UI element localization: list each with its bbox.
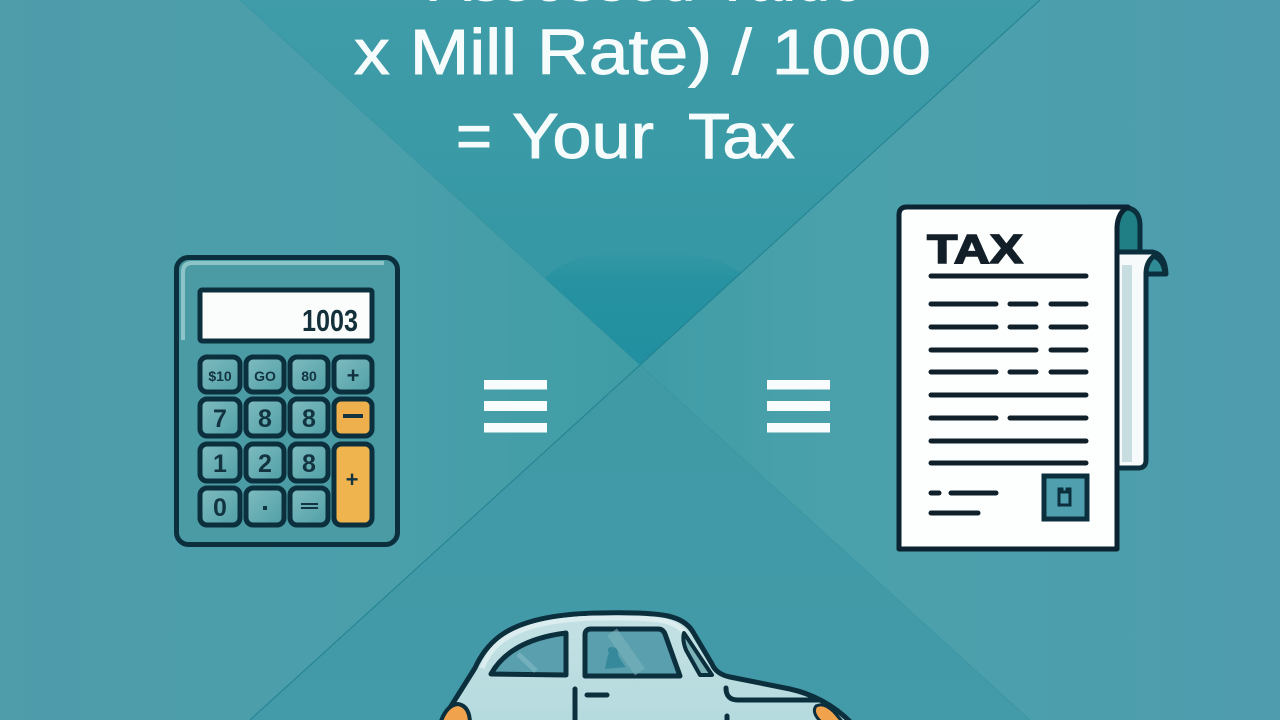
heading: formula (354, 0, 931, 172)
calculator key labels: 8 (258, 405, 272, 433)
icon: tax document (899, 207, 1166, 549)
calculator key labels: + (347, 363, 359, 388)
calculator key labels: 80 (301, 368, 317, 384)
document text lines (931, 276, 1086, 513)
calculator key labels: 7 (213, 405, 227, 433)
windshield (683, 633, 712, 675)
calculator key labels: 8 (302, 450, 316, 478)
icon: equals-style bars right (767, 380, 830, 432)
document page (899, 207, 1128, 549)
rear light (440, 704, 470, 720)
door details (575, 688, 820, 720)
calculator buttons (200, 357, 372, 525)
document title: TAX (927, 226, 1023, 272)
icon: equals-style bars left (484, 380, 547, 432)
document stamp (1044, 476, 1087, 519)
heading: formula: Tax (688, 100, 795, 172)
document back sheet (1116, 208, 1166, 468)
calculator display: 1003 (302, 303, 358, 338)
rear window (491, 633, 566, 675)
icon: calculator (176, 258, 398, 544)
calculator key labels: 8 (302, 405, 316, 433)
calculator display (200, 290, 372, 341)
calculator key labels: 1 (213, 450, 227, 478)
car body (436, 613, 858, 720)
heading: formula: x Mill Rate) / 1000 (354, 16, 931, 88)
calculator key labels: 2 (258, 450, 272, 478)
front light (814, 705, 846, 720)
icon: car (436, 613, 858, 720)
calculator key labels (208, 363, 363, 522)
calculator key labels: GO (254, 368, 276, 384)
heading: formula: = (456, 100, 492, 172)
front window (585, 629, 680, 676)
calculator key labels: 0 (213, 494, 227, 522)
calculator key labels: + (346, 467, 358, 492)
calculator key labels: $10 (208, 368, 232, 384)
background panels (240, 0, 1040, 720)
heading: formula: Your (512, 100, 654, 172)
